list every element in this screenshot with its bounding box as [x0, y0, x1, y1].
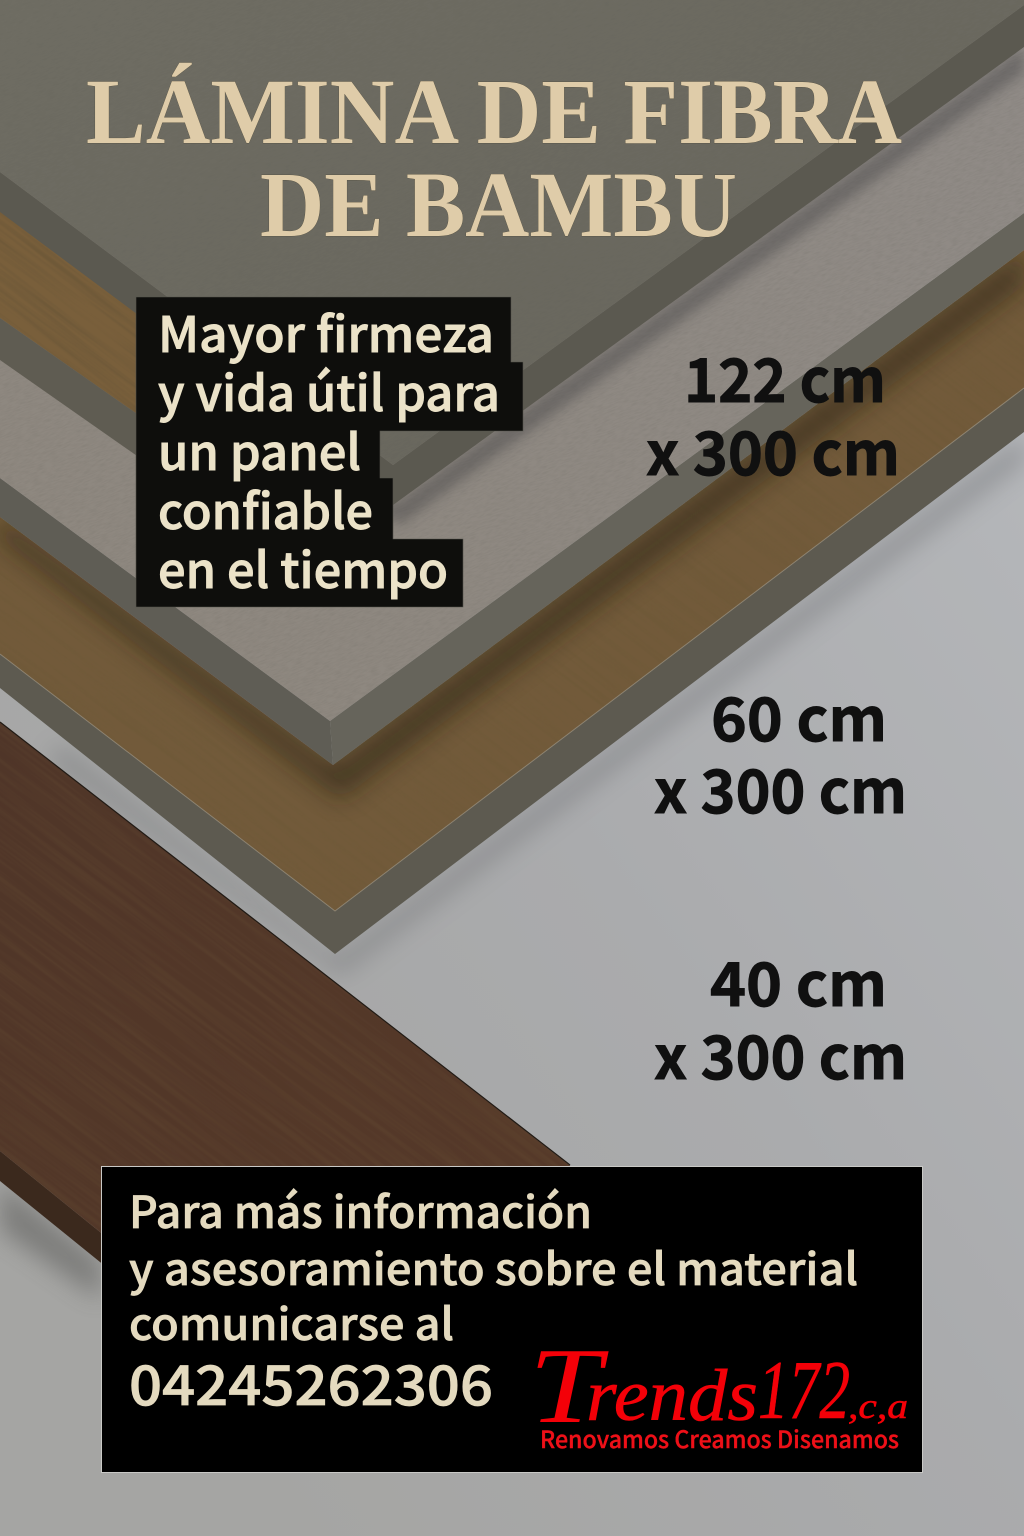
callout text: un panel — [158, 414, 361, 485]
title line 2: DE BAMBU — [260, 154, 737, 257]
floor shadow under boards — [0, 436, 1024, 1300]
dimensions: 60 cm x 300 cm — [654, 672, 907, 831]
small oak grain — [0, 200, 392, 528]
logo: Trends172: 172 — [758, 1344, 850, 1437]
callout text: y vida útil para — [158, 355, 500, 426]
board: oak wood 60 cm — [0, 250, 1024, 954]
top board side — [0, 5, 1024, 505]
callout text: Mayor firmeza — [158, 296, 494, 367]
contact panel background — [102, 1166, 922, 1472]
oak board edge highlight — [0, 388, 1024, 911]
board: dark olive top — [0, 0, 1024, 505]
logo: Trends172: ,c,a — [848, 1386, 908, 1426]
dimensions: 60 cm x 300 cm: 60 cm — [711, 672, 887, 759]
callout text: en el tiempo — [158, 532, 448, 603]
title — [86, 61, 902, 257]
board: light grey 122 cm — [0, 0, 1024, 765]
grey board left side — [0, 478, 333, 765]
top board face — [0, 0, 1024, 465]
logo tagline: Renovamos Creamos Disenamos — [540, 1420, 899, 1455]
dimensions: 122 cm x 300 cm — [646, 333, 900, 493]
oak board side — [0, 388, 1024, 954]
contact text: Para más información — [129, 1177, 592, 1241]
dimensions: 40 cm x 300 cm — [654, 937, 907, 1097]
contact panel — [102, 1166, 922, 1472]
callout text — [158, 296, 500, 603]
oak board shadow from upper board — [0, 250, 1024, 800]
grey board shadow from top board — [393, 48, 1024, 526]
small oak face — [0, 200, 392, 528]
contact text: comunicarse al — [129, 1289, 454, 1353]
brown board side — [0, 1151, 300, 1424]
grey board face — [0, 0, 1024, 721]
contact text: y asesoramiento sobre el material — [129, 1234, 858, 1298]
dimensions: 40 cm x 300 cm: x 300 cm — [654, 1010, 907, 1097]
brown board face — [0, 722, 600, 1394]
dimensions: 40 cm x 300 cm: 40 cm — [710, 937, 887, 1024]
board: dark brown wood — [0, 722, 600, 1424]
callout: benefits — [136, 296, 523, 607]
callout background — [136, 297, 523, 607]
phone number: 04245262306 — [129, 1341, 493, 1421]
dimensions: 122 cm x 300 cm: 122 cm — [684, 333, 886, 420]
logo: Trends172 — [529, 1327, 908, 1446]
top board texture — [0, 0, 1024, 465]
logo: Trends172: T — [529, 1327, 609, 1446]
contact text — [129, 1177, 858, 1353]
dimensions: 122 cm x 300 cm: x 300 cm — [646, 406, 900, 493]
grey board right side — [330, 213, 1024, 765]
dimensions: 60 cm x 300 cm: x 300 cm — [654, 744, 907, 831]
callout text: confiable — [158, 473, 373, 544]
logo: Trends172: rends — [586, 1355, 758, 1437]
brown board grain — [0, 722, 600, 1394]
small oak side — [0, 318, 300, 570]
title line 1: LÁMINA DE FIBRA — [86, 61, 902, 164]
brown board edge — [0, 722, 570, 1165]
oak board face — [0, 250, 1024, 911]
oak board grain — [0, 250, 1024, 911]
board: small oak strip — [0, 200, 392, 570]
grey board texture — [0, 0, 1024, 721]
